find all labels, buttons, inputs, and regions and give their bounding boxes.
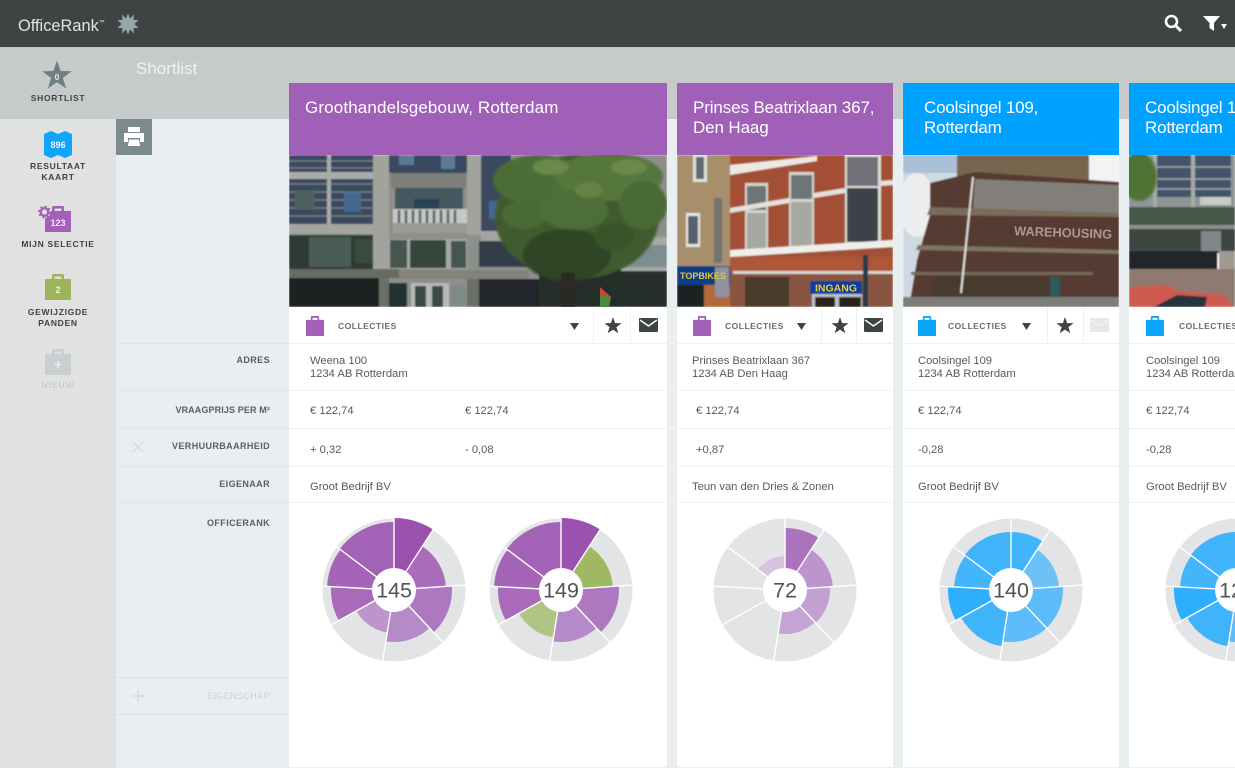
price a: € 122,74	[310, 405, 354, 417]
rentability: +0,87	[696, 444, 724, 456]
owner: Groot Bedrijf BV	[918, 481, 999, 493]
chart: rose 140: 140	[993, 578, 1029, 602]
address	[310, 355, 408, 380]
icon: collection bag	[918, 316, 936, 336]
chart: rose 145: 145	[376, 578, 412, 602]
label: eigenschap: EIGENSCHAP	[207, 691, 270, 701]
card heading: Groothandelsgebouw, Rotterdam	[305, 98, 559, 117]
address: Coolsingel 109	[1146, 355, 1220, 367]
address: Weena 100	[310, 355, 367, 367]
nav item: shortlist	[31, 60, 85, 103]
dropdown arrow	[797, 323, 806, 330]
chart: rose partial	[1166, 518, 1235, 662]
address: Coolsingel 109	[918, 355, 992, 367]
icon: collection bag	[1146, 316, 1164, 336]
icon: print button	[116, 119, 152, 155]
top bar	[0, 0, 1235, 47]
icon: mail disabled	[1090, 318, 1109, 332]
card heading	[903, 83, 1119, 155]
icon: star	[1056, 317, 1074, 334]
nav item: mijn selectie	[21, 206, 95, 249]
icon: mail	[639, 318, 658, 332]
chart: rose 145	[322, 518, 466, 662]
chart: rose 149: 149	[543, 578, 579, 602]
photo: brick corner building	[677, 155, 893, 307]
rentability: -0,28	[1146, 444, 1172, 456]
chart: rose 72: 72	[773, 578, 797, 602]
nav item: nieuw: NIEUW	[41, 380, 75, 390]
label: officerank: OFFICERANK	[207, 518, 270, 528]
collecties label: COLLECTIES	[338, 321, 397, 331]
collecties label: COLLECTIES	[948, 321, 1007, 331]
rentability b: - 0,08	[465, 444, 494, 456]
chart: rose 149	[490, 518, 632, 662]
price: € 122,74	[696, 405, 740, 417]
owner: Groot Bedrijf BV	[1146, 481, 1227, 493]
chart: rose 140	[940, 518, 1082, 662]
nav item: gewijzigde panden: PANDEN	[38, 318, 78, 328]
icon: burst logo	[118, 13, 138, 35]
nav item: resultaat kaart: RESULTAAT	[30, 161, 86, 171]
photo: warehouse	[903, 155, 1119, 307]
nav item: gewijzigde panden: GEWIJZIGDE	[28, 307, 88, 317]
label: vraagprijs: VRAAGPRIJS PER M²	[175, 405, 270, 415]
collecties label: COLLECTIES	[725, 321, 784, 331]
label: eigenaar: EIGENAAR	[219, 479, 270, 489]
card heading: Rotterdam	[924, 118, 1002, 137]
panel: card Coolsingel partial	[1129, 83, 1235, 767]
card heading	[289, 83, 667, 155]
address: Prinses Beatrixlaan 367	[692, 355, 810, 367]
panel: card Groothandelsgebouw	[289, 83, 667, 767]
rentability: -0,28	[918, 444, 944, 456]
photo: office with bikes and red car	[1129, 155, 1235, 307]
nav item: resultaat kaart: KAART	[41, 172, 75, 182]
address	[918, 355, 1016, 380]
icon: collection bag	[693, 316, 711, 336]
address	[692, 355, 810, 380]
nav item: gewijzigde panden: 2	[55, 285, 61, 295]
card heading: Den Haag	[693, 118, 769, 137]
card heading	[1129, 83, 1235, 155]
icon: add row	[132, 690, 144, 702]
address: 1234 AB Den Haag	[692, 368, 788, 380]
dropdown arrow	[1022, 323, 1031, 330]
chart: rose 72	[714, 518, 856, 662]
logo: OfficeRank: OfficeRank™	[18, 16, 105, 34]
address: 1234 AB Rotterdam	[310, 368, 408, 380]
panel: card Coolsingel 109	[903, 83, 1119, 767]
price b: € 122,74	[465, 405, 509, 417]
photo: warehouse: WAREHOUSING	[1014, 223, 1112, 242]
icon: search	[1164, 14, 1182, 32]
icon: mail	[864, 318, 883, 332]
card heading: Coolsingel 109,	[924, 98, 1038, 117]
photo: brick corner building: TOPBIKES	[680, 271, 726, 281]
nav item: shortlist: SHORTLIST	[31, 93, 85, 103]
photo: office building with tree	[289, 155, 667, 307]
price: € 122,74	[1146, 405, 1190, 417]
card heading: Prinses Beatrixlaan 367,	[693, 98, 874, 117]
icon: star	[604, 317, 622, 334]
nav item: mijn selectie: MIJN SELECTIE	[21, 239, 95, 249]
card heading	[677, 83, 893, 155]
label: adres: ADRES	[236, 355, 270, 365]
owner: Groot Bedrijf BV	[310, 481, 391, 493]
address	[1146, 355, 1235, 380]
subheader band	[0, 47, 1235, 119]
panel: card Prinses Beatrixlaan	[677, 83, 893, 767]
icon: collection bag	[306, 316, 324, 336]
page heading: Shortlist	[136, 59, 197, 78]
nav item: resultaat kaart	[30, 131, 86, 182]
nav item: resultaat kaart: 896	[50, 140, 66, 150]
property labels panel	[116, 343, 288, 715]
nav item: nieuw	[41, 349, 75, 390]
label: verhuurbaarheid: VERHUURBAARHEID	[172, 441, 270, 451]
photo: brick corner building: INGANG	[815, 282, 857, 294]
dropdown arrow	[570, 323, 579, 330]
panel: sidebar navigation	[0, 119, 116, 768]
card heading: Rotterdam	[1145, 118, 1223, 137]
owner: Teun van den Dries & Zonen	[692, 481, 834, 493]
price: € 122,74	[918, 405, 962, 417]
icon: remove row	[132, 441, 144, 453]
icon: star	[832, 317, 848, 334]
address: 1234 AB Rotterdam	[918, 368, 1016, 380]
icon: filter	[1203, 16, 1227, 31]
nav item: mijn selectie: 123	[50, 218, 66, 228]
nav item: gewijzigde panden	[28, 274, 88, 328]
nav item: shortlist: 0	[55, 72, 60, 82]
rentability a: + 0,32	[310, 444, 341, 456]
